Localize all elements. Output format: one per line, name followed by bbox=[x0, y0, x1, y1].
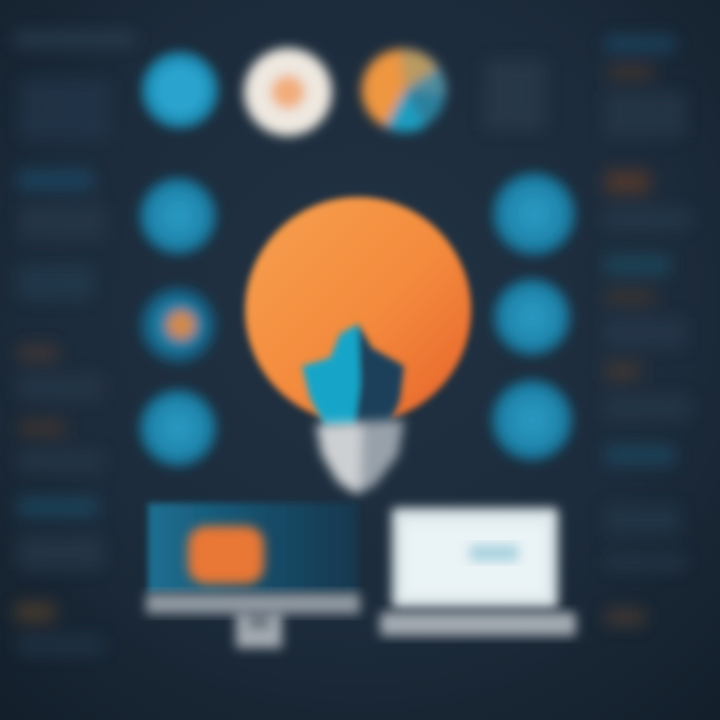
right icon column: teal circle 1 bbox=[492, 172, 576, 256]
top row icon: teal circle bbox=[142, 52, 218, 128]
monitor orange block bbox=[188, 526, 264, 584]
laptop screen bbox=[392, 508, 558, 608]
left column of blurred text bbox=[15, 32, 135, 655]
right icon column: teal circle 2 bbox=[493, 278, 571, 356]
desktop monitor bbox=[146, 503, 360, 648]
left icon column: teal circle 3 bbox=[139, 389, 217, 467]
monitor screen bbox=[148, 503, 358, 593]
top row icon: pie chart bbox=[362, 49, 446, 132]
monitor stand bbox=[236, 612, 282, 648]
right column of blurred text bbox=[485, 36, 690, 626]
left icon column: teal circle with orange centre bbox=[140, 287, 216, 363]
monitor base bar bbox=[146, 593, 360, 614]
laptop base bbox=[380, 612, 576, 636]
left icon column: teal circle 1 bbox=[139, 177, 217, 255]
laptop bbox=[380, 508, 576, 636]
top row icon: white circle with orange centre bbox=[244, 48, 332, 136]
central orange sphere bbox=[245, 197, 471, 423]
central shield base bbox=[316, 420, 404, 494]
laptop screen detail bbox=[470, 545, 518, 561]
right icon column: teal circle 3 bbox=[491, 379, 573, 461]
central teal flame shape bbox=[302, 324, 404, 428]
